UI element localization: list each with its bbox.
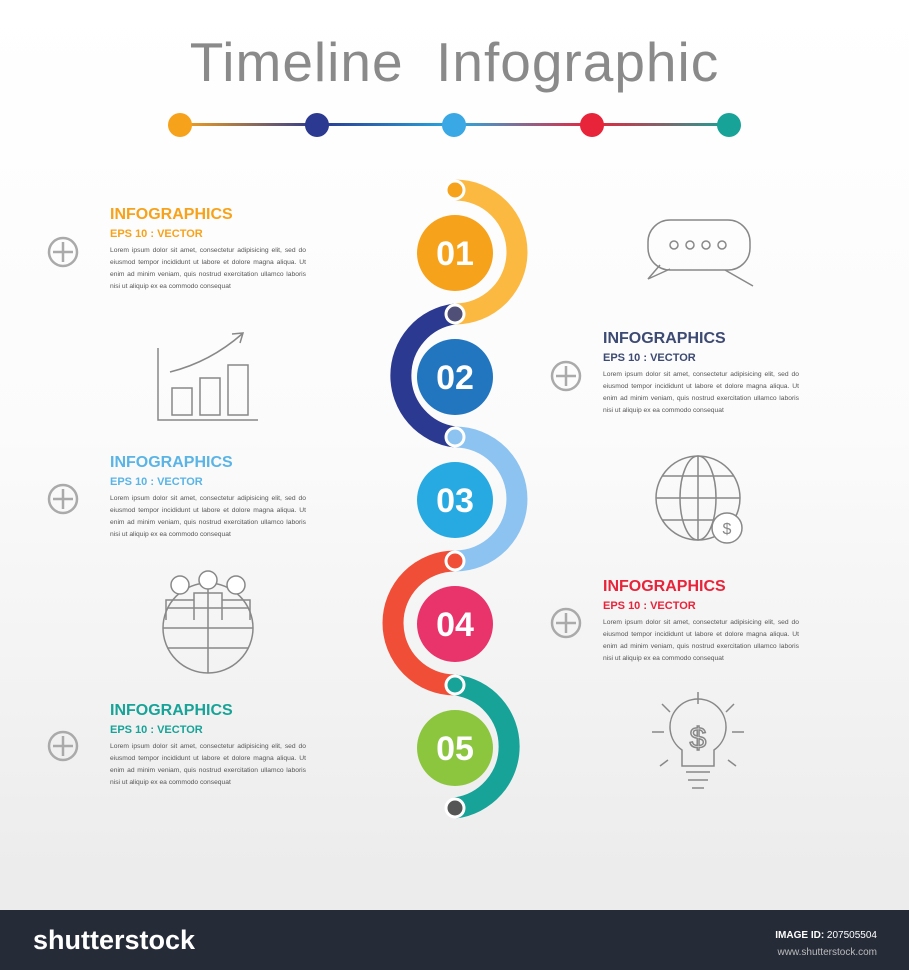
footer bar bbox=[0, 910, 909, 970]
title: Timeline Infographic bbox=[190, 31, 719, 93]
footer bar: IMAGE ID: 207505504 bbox=[775, 930, 877, 941]
timeline spiral: 01 bbox=[436, 235, 474, 273]
timeline spiral: 03 bbox=[436, 482, 474, 520]
text block 3: Lorem ipsum dolor sit amet, consectetur adipisicing elit, sed do eiusmod tempor incididunt ut labore et dolore magna aliqua. Ut enim ad minim veniam, quis nostrud exercitation ullamco laboris nisi ut aliquip ex ea commodo consequat bbox=[110, 495, 306, 538]
timeline spiral: 05 bbox=[436, 730, 474, 768]
text block 3: INFOGRAPHICS bbox=[110, 454, 233, 471]
text block 1: Lorem ipsum dolor sit amet, consectetur adipisicing elit, sed do eiusmod tempor incididunt ut labore et dolore magna aliqua. Ut enim ad minim veniam, quis nostrud exercitation ullamco laboris nisi ut aliquip ex ea commodo consequat bbox=[110, 247, 306, 290]
timeline spiral: 02 bbox=[436, 359, 474, 397]
text block 4: INFOGRAPHICS bbox=[603, 578, 726, 595]
text block 2 bbox=[603, 330, 799, 414]
text block 5: EPS 10 : VECTOR bbox=[110, 724, 203, 736]
text block 2: Lorem ipsum dolor sit amet, consectetur adipisicing elit, sed do eiusmod tempor incididunt ut labore et dolore magna aliqua. Ut enim ad minim veniam, quis nostrud exercitation ullamco laboris nisi ut aliquip ex ea commodo consequat bbox=[603, 371, 799, 414]
text block 5: Lorem ipsum dolor sit amet, consectetur adipisicing elit, sed do eiusmod tempor incididunt ut labore et dolore magna aliqua. Ut enim ad minim veniam, quis nostrud exercitation ullamco laboris nisi ut aliquip ex ea commodo consequat bbox=[110, 743, 306, 786]
timeline spiral: 04 bbox=[436, 606, 474, 644]
text block 4: EPS 10 : VECTOR bbox=[603, 600, 696, 612]
text block 2: INFOGRAPHICS bbox=[603, 330, 726, 347]
text block 2: EPS 10 : VECTOR bbox=[603, 352, 696, 364]
footer bar: www.shutterstock.com bbox=[778, 947, 877, 958]
line icons: $ bbox=[723, 521, 732, 538]
text block 5 bbox=[110, 702, 306, 786]
text block 4: Lorem ipsum dolor sit amet, consectetur adipisicing elit, sed do eiusmod tempor incididunt ut labore et dolore magna aliqua. Ut enim ad minim veniam, quis nostrud exercitation ullamco laboris nisi ut aliquip ex ea commodo consequat bbox=[603, 619, 799, 662]
text block 3 bbox=[110, 454, 306, 538]
text block 3: EPS 10 : VECTOR bbox=[110, 476, 203, 488]
text block 1: EPS 10 : VECTOR bbox=[110, 228, 203, 240]
line icons: $ bbox=[690, 722, 707, 755]
text block 5: INFOGRAPHICS bbox=[110, 702, 233, 719]
text block 4 bbox=[603, 578, 799, 662]
text block 1: INFOGRAPHICS bbox=[110, 206, 233, 223]
footer bar: shutterstock bbox=[33, 925, 195, 955]
text block 1 bbox=[110, 206, 306, 290]
